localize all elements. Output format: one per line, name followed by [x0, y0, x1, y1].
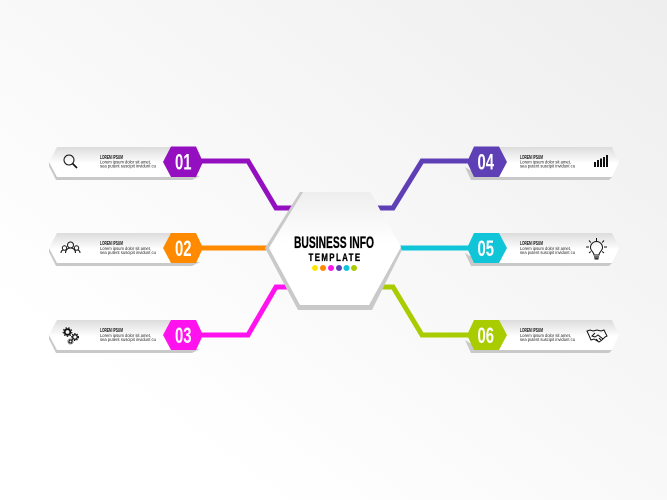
number 03: 03	[175, 323, 192, 348]
text 04: LOREM IPSUM	[520, 155, 543, 161]
text 05: sea putent suscipit invidunt cu	[520, 250, 575, 255]
icon: handshake	[587, 330, 607, 342]
title: BUSINESS INFO	[294, 234, 374, 252]
hexagon 01	[163, 146, 203, 177]
icon: signal bars	[594, 155, 608, 167]
connector 03	[200, 287, 292, 335]
text 06: sea putent suscipit invidunt cu	[520, 337, 575, 342]
panel 06	[465, 320, 619, 353]
colour dots	[312, 265, 357, 271]
number 02: 02	[175, 236, 192, 261]
text 01: sea putent suscipit invidunt cu	[100, 164, 156, 168]
icon: people	[61, 242, 80, 253]
panel 02	[49, 233, 203, 266]
text 02: sea putent suscipit invidunt cu	[100, 250, 156, 255]
hexagon 05	[467, 233, 507, 263]
text 06: Lorem ipsum dolor sit amet,	[520, 333, 571, 338]
text 04: Lorem ipsum dolor sit amet,	[520, 160, 571, 164]
text 03: sea putent suscipit invidunt cu	[100, 337, 156, 342]
connector 05	[398, 246, 470, 250]
number 05: 05	[478, 236, 494, 261]
connector 06	[376, 287, 470, 335]
text 05	[520, 241, 575, 255]
text 01: LOREM IPSUM	[100, 155, 123, 161]
text 03: LOREM IPSUM	[100, 328, 123, 334]
number 01: 01	[175, 150, 192, 174]
text 06: LOREM IPSUM	[520, 328, 543, 334]
icon: magnifier	[64, 155, 77, 168]
icon: gears	[63, 328, 78, 344]
text 02	[100, 241, 156, 255]
connector 01	[200, 161, 292, 208]
panel 03	[49, 320, 203, 353]
text 05: LOREM IPSUM	[520, 241, 543, 247]
text 04: sea putent suscipit invidunt cu	[520, 164, 575, 168]
text 04	[520, 155, 575, 168]
hexagon 04	[467, 146, 507, 177]
panel 01	[49, 146, 203, 180]
text 06	[520, 328, 575, 342]
text 02: Lorem ipsum dolor sit amet,	[100, 246, 151, 251]
text 01	[100, 155, 156, 168]
text 05: Lorem ipsum dolor sit amet,	[520, 246, 571, 251]
subtitle: TEMPLATE	[308, 252, 362, 264]
text 02: LOREM IPSUM	[100, 241, 123, 247]
hexagon 03	[163, 320, 203, 350]
hexagon 06	[467, 320, 507, 350]
number 04: 04	[478, 150, 495, 174]
central hexagon	[265, 192, 402, 310]
number 06: 06	[478, 323, 494, 348]
connector 02	[200, 246, 272, 250]
icon: light bulb	[586, 238, 607, 259]
text 03	[100, 328, 156, 342]
panel 04	[465, 146, 619, 180]
connector 04	[376, 161, 470, 208]
hexagon 02	[163, 233, 203, 263]
text 01: Lorem ipsum dolor sit amet,	[100, 160, 151, 164]
panel 05	[465, 233, 619, 266]
text 03: Lorem ipsum dolor sit amet,	[100, 333, 151, 338]
